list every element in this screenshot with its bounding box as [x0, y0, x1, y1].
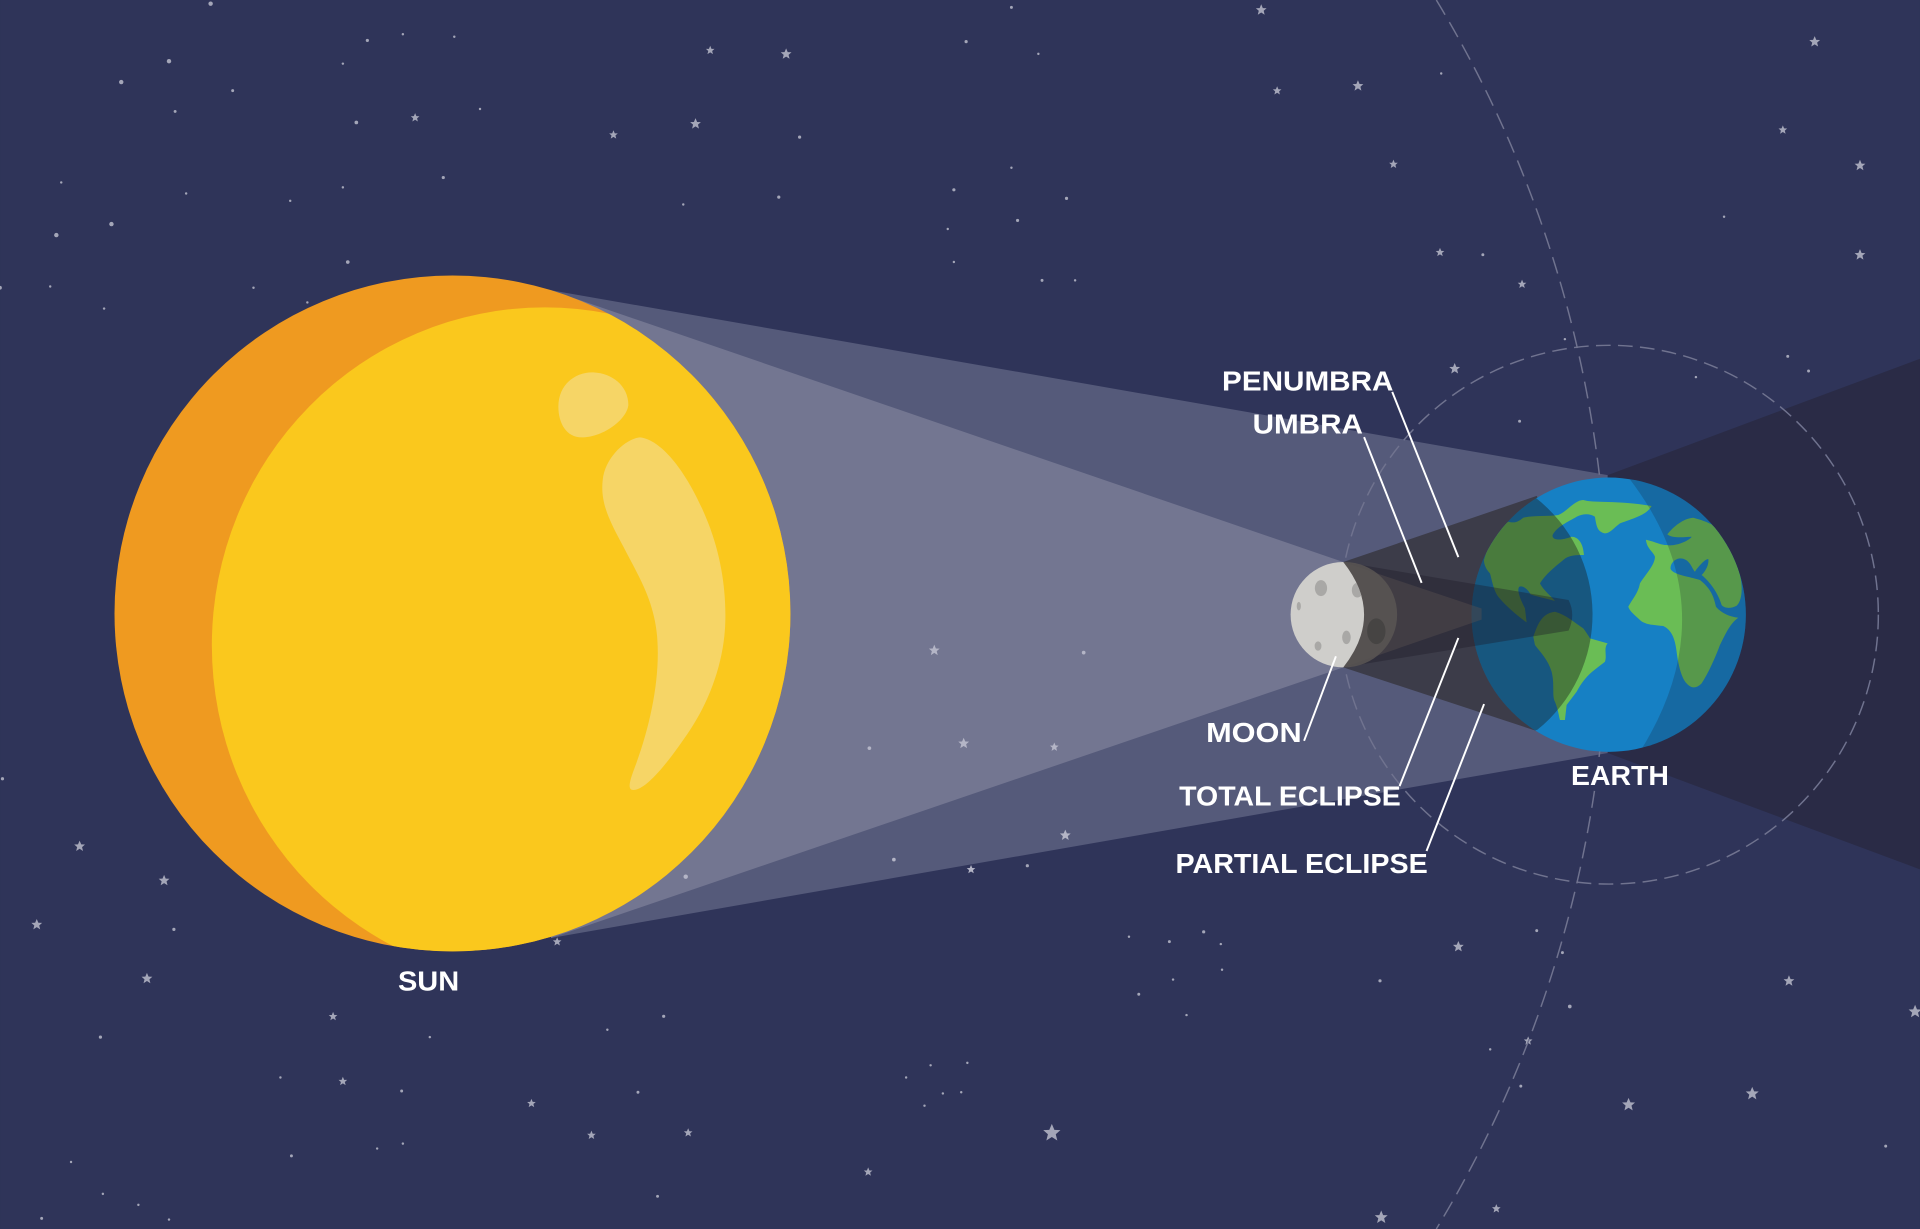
earth orbit dashed arc: [1436, 0, 1608, 1229]
earth cast shadow region: [1608, 359, 1920, 869]
label: sun: SUN: [398, 966, 459, 997]
ocean: [1472, 478, 1746, 752]
left eclipse shade: [1472, 498, 1592, 730]
label: earth: EARTH: [1571, 760, 1669, 791]
moon lit side: [1291, 562, 1364, 667]
moon dark disc: [1292, 562, 1397, 667]
stars in light cone: [684, 645, 1086, 879]
penumbra shadow behind moon: [1343, 496, 1592, 731]
right night shade: [1630, 480, 1746, 748]
label: total eclipse: TOTAL ECLIPSE: [1179, 781, 1401, 812]
earth: [1472, 478, 1746, 752]
sun outer orange disc: [115, 276, 790, 951]
label: penumbra: PENUMBRA: [1222, 366, 1394, 397]
umbra inner cone: [1343, 562, 1482, 667]
continents: [1484, 500, 1742, 720]
leader lines: [1304, 392, 1484, 851]
penumbra light cone: [551, 290, 1608, 938]
sun: [114, 276, 790, 952]
dark side crater: [1367, 618, 1386, 644]
sun inner yellow disc: [212, 307, 790, 952]
moon: [1291, 562, 1397, 667]
umbra light cone: [551, 290, 1343, 938]
moon craters: [1297, 580, 1363, 651]
moon orbit dashed circle: [1340, 345, 1878, 884]
label: moon: MOON: [1206, 717, 1302, 748]
umbra dark cone: [1343, 562, 1572, 667]
sun highlights: [558, 372, 725, 790]
label: partial eclipse: PARTIAL ECLIPSE: [1176, 848, 1428, 879]
label: umbra: UMBRA: [1253, 408, 1363, 439]
